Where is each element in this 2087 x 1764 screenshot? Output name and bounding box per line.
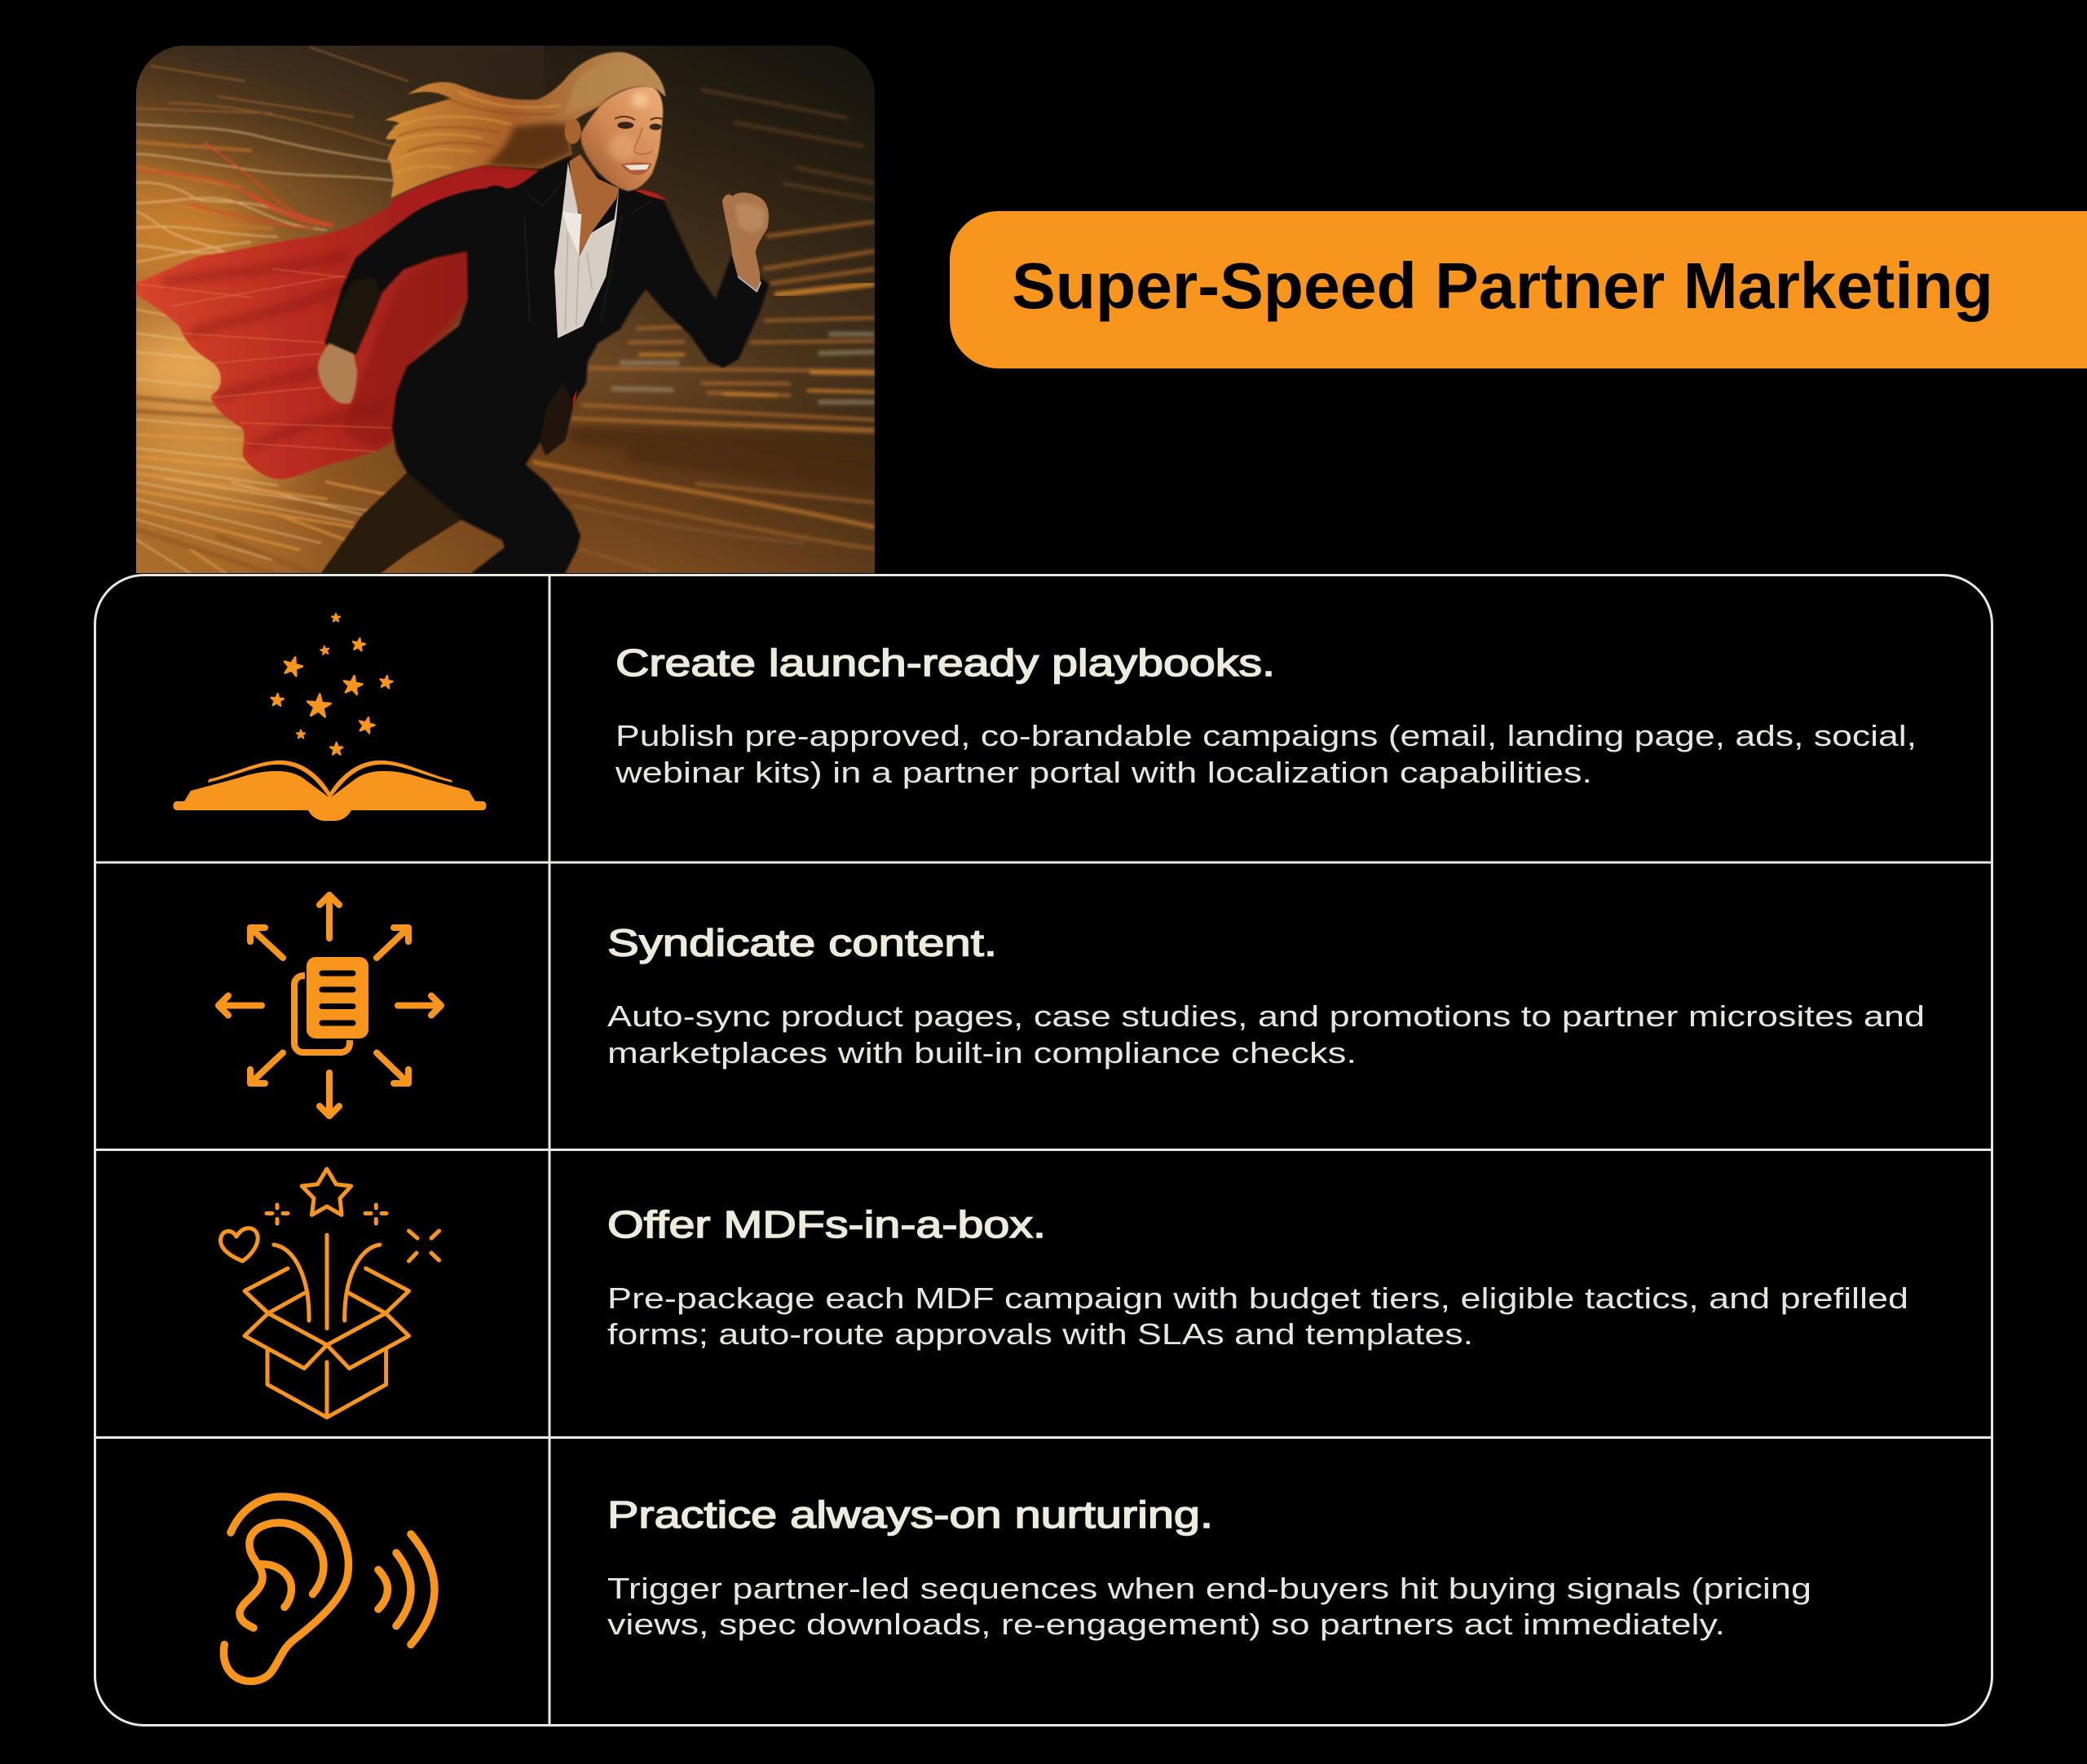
photo: businesswoman in red cape running with speed streaks <box>106 46 875 573</box>
body: row 2: Auto-sync product pages, case studies, and promotions to partner microsites and <box>607 999 1925 1033</box>
row 1: playbooks <box>173 613 1917 821</box>
streaks right of figure <box>763 222 875 284</box>
body: row 3: forms; auto-route approvals with SLAs and templates. <box>607 1317 1473 1351</box>
body: row 3 <box>607 1281 1908 1351</box>
body: row 1: Publish pre-approved, co-brandable campaigns (email, landing page, ads, social, <box>616 719 1917 752</box>
body: row 1: webinar kits) in a partner portal with localization capabilities. <box>615 756 1592 789</box>
hair <box>385 52 666 198</box>
title banner <box>950 211 2087 368</box>
fist and wrist <box>722 192 769 292</box>
head, hair and upper body <box>385 52 769 338</box>
icon: open box with star and heart <box>221 1169 439 1418</box>
ear <box>565 118 581 144</box>
rear leg shadow <box>321 472 462 573</box>
row 2: syndicate <box>218 895 1925 1116</box>
cape collar <box>391 165 540 227</box>
facial features <box>616 117 663 175</box>
shirt <box>554 162 619 338</box>
body: row 2: marketplaces with built-in compliance checks. <box>607 1036 1357 1069</box>
body: row 4 <box>607 1572 1811 1641</box>
body: row 1 <box>615 719 1917 789</box>
hand left <box>318 343 357 404</box>
heading: offer MDFs: Offer MDFs-in-a-box. <box>607 1203 1046 1246</box>
icon: open book with stars <box>173 613 486 821</box>
row 4: nurturing <box>223 1493 1811 1681</box>
heading: always-on nurturing: Practice always-on nurturing. <box>607 1493 1213 1536</box>
icon: document with radiating arrows <box>218 895 441 1116</box>
title text: Super-Speed Partner Marketing <box>1012 249 1993 322</box>
body: row 2 <box>607 999 1925 1069</box>
face <box>580 86 663 191</box>
body: row 4: views, spec downloads, re-engagement) so partners act immediately. <box>607 1607 1725 1641</box>
sleeve highlight and jacket tail <box>326 277 381 354</box>
heading: create launch-ready playbooks: Create launch-ready playbooks. <box>616 642 1275 684</box>
body: row 3: Pre-package each MDF campaign with budget tiers, eligible tactics, and prefilled <box>607 1281 1908 1315</box>
icon: ear with sound waves <box>223 1497 435 1681</box>
left streaks <box>136 47 408 573</box>
jacket lapel creases <box>524 182 652 323</box>
row 3: MDFs <box>221 1169 1908 1418</box>
right streaks <box>532 318 875 572</box>
body: row 4: Trigger partner-led sequences when end-buyers hit buying signals (pricing <box>607 1572 1811 1605</box>
red cape <box>136 165 503 479</box>
heading: syndicate content: Syndicate content. <box>607 921 997 964</box>
figure: jacket and trousers <box>326 157 768 573</box>
neck <box>569 154 619 256</box>
table panel <box>95 575 1992 1725</box>
